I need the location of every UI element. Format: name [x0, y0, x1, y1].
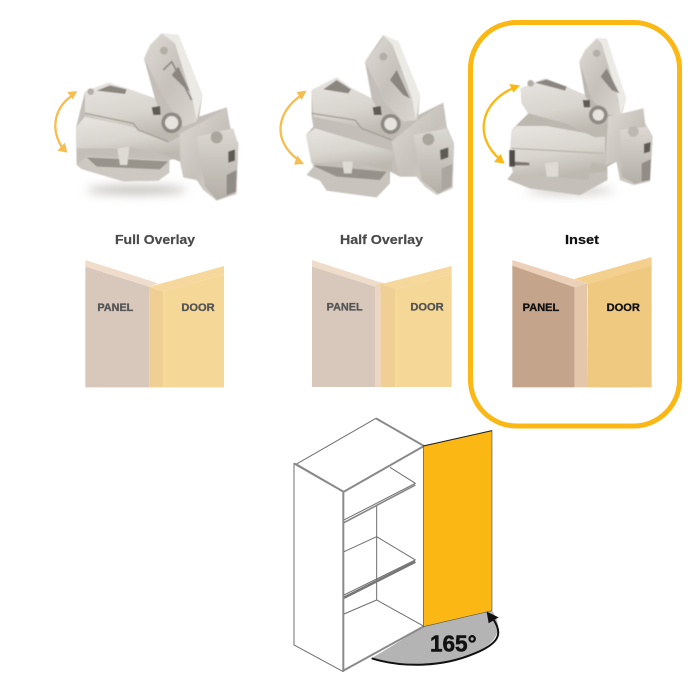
heading: half overlay: Half Overlay: [340, 233, 423, 247]
panel diagram: full overlay: [85, 260, 224, 387]
cabinet carcass: [294, 418, 424, 672]
hinge: inset: [484, 38, 653, 195]
label: door: DOOR: [181, 302, 215, 314]
hinge: full overlay: [55, 33, 238, 201]
hinge shadow: [527, 187, 613, 195]
arrow: swing: [484, 84, 520, 164]
panel diagram: half overlay: [312, 260, 452, 387]
cabinet diagram with open door: [294, 418, 499, 672]
arrow: swing: [280, 91, 307, 165]
swing sector: [372, 611, 498, 665]
hinge: half overlay: [280, 35, 454, 197]
label: door: DOOR: [607, 302, 640, 314]
heading: inset: Inset: [565, 233, 600, 247]
label: panel: PANEL: [97, 302, 133, 314]
panel diagram: inset: [512, 257, 652, 387]
label: panel: PANEL: [523, 302, 559, 314]
hinge body: [306, 35, 454, 197]
label: panel: PANEL: [327, 302, 363, 314]
label: door: DOOR: [410, 302, 444, 314]
label: 165 degrees: 165°: [430, 631, 477, 657]
highlight frame: inset: [470, 22, 680, 426]
door: [423, 431, 492, 627]
heading: full overlay: Full Overlay: [115, 233, 195, 247]
arrow: door swing: [372, 612, 499, 665]
hinge shadow: [87, 185, 187, 195]
arrow: swing: [55, 91, 77, 153]
